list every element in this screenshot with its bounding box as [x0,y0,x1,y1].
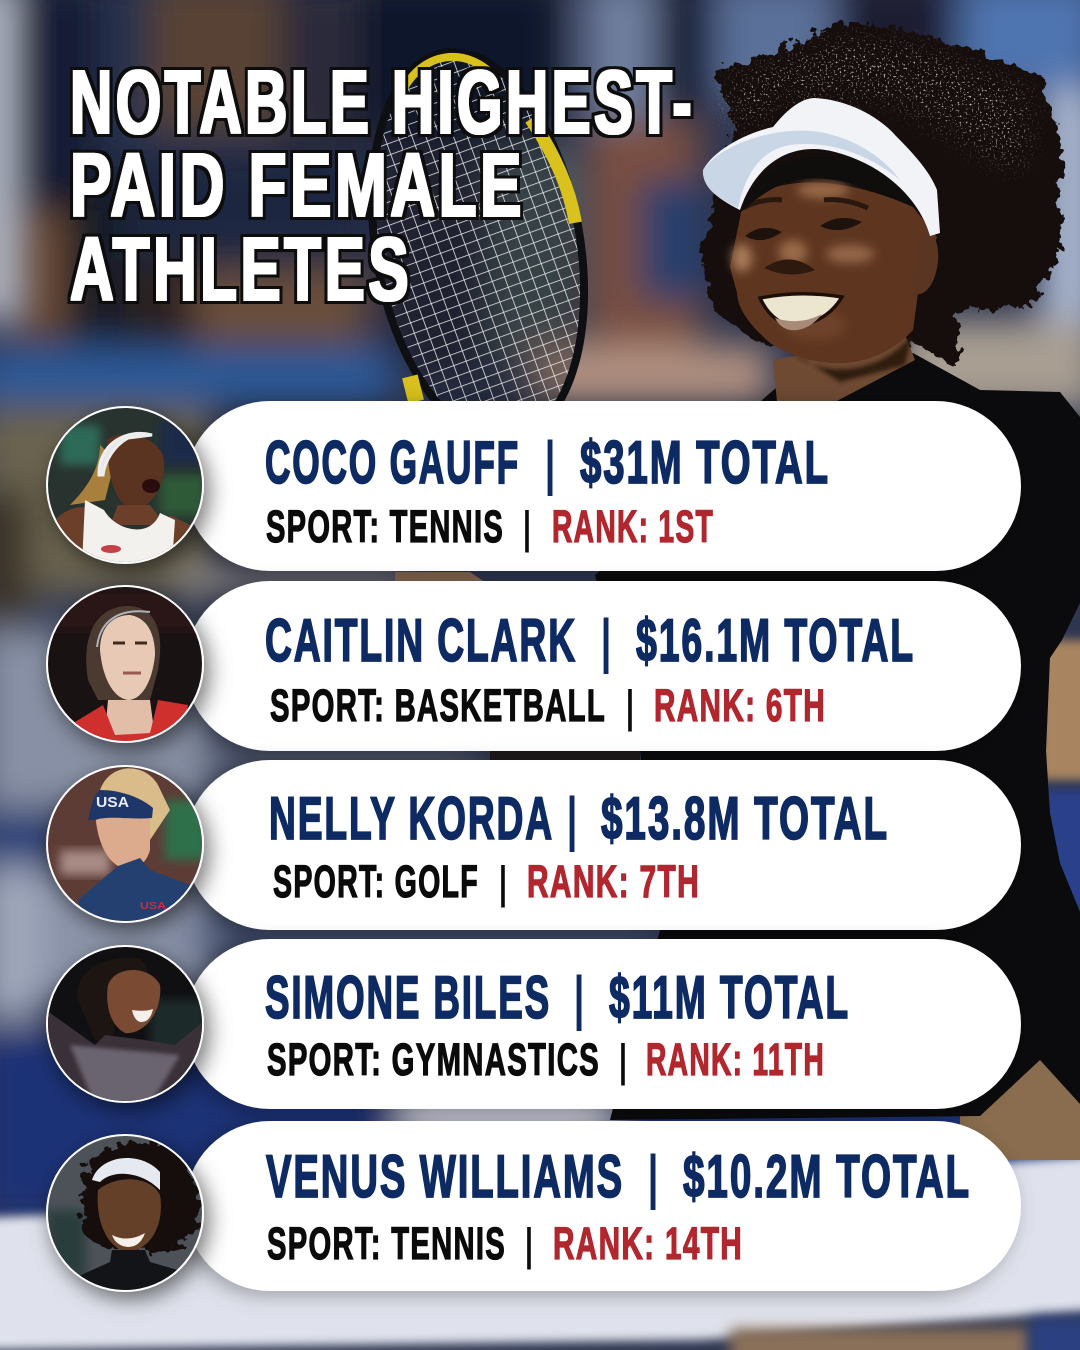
visor [703,98,940,236]
row: Coco Gauff: RANK: 1ST [552,501,714,552]
name and total: VENUS WILLIAMS [266,1143,624,1210]
row: Coco Gauff: $31M TOTAL [580,429,830,496]
row: Venus Williams: | [523,1219,535,1270]
row: Nelly Korda: RANK: 7TH [527,856,700,907]
smile [760,294,842,326]
row: Venus Williams: | [645,1143,661,1210]
row: Nelly Korda: | [564,785,580,852]
row: Venus Williams [46,1121,1021,1295]
sport and rank: SPORT: GYMNASTICS [267,1034,600,1085]
row: Caitlin Clark [46,581,1021,751]
row: Caitlin Clark: $16.1M TOTAL [636,607,915,674]
eyes and brows [745,218,862,240]
row: Coco Gauff: | [542,429,558,496]
portrait: Nelly Korda: USA [96,794,129,811]
row: Caitlin Clark: | [624,681,636,732]
sport and rank: SPORT: TENNIS [267,1218,506,1269]
title: ATHLETES [70,220,412,320]
row: Coco Gauff: | [521,502,533,553]
pill [185,581,1021,751]
row: Coco Gauff [46,401,1021,571]
row: Venus Williams: RANK: 14TH [553,1218,743,1269]
row: Nelly Korda: | [497,857,509,908]
title: PAID FEMALE [70,136,525,236]
neck [773,335,915,402]
arm and thigh [1040,640,1080,780]
row: Simone Biles: $11M TOTAL [609,964,850,1031]
name and total: COCO GAUFF [265,429,520,496]
pill [185,939,1021,1109]
sport and rank: SPORT: BASKETBALL [270,680,606,731]
pill [185,401,1021,571]
visor band [741,156,917,212]
hair [700,22,1063,367]
portrait: Simone Biles [46,945,205,1105]
title [70,53,695,320]
hair highlights [725,40,1030,170]
face highlights [732,182,874,340]
row: Nelly Korda: $13.8M TOTAL [601,785,889,852]
dress [595,353,1080,1120]
name and total: SIMONE BILES [265,964,551,1031]
row: Simone Biles: | [571,964,587,1031]
sport and rank: SPORT: TENNIS [266,501,504,552]
row: Caitlin Clark: | [598,607,614,674]
portrait: Caitlin Clark [46,585,206,745]
name and total: NELLY KORDA [269,785,554,852]
racket [344,35,612,457]
row: Simone Biles: | [617,1035,629,1086]
venus williams hero photo [395,22,1080,1160]
nose [764,259,815,275]
pill [185,1121,1021,1291]
sport and rank: SPORT: GOLF [273,856,479,907]
name and total: CAITLIN CLARK [265,607,577,674]
title: NOTABLE HIGHEST- [70,53,695,153]
portrait: Coco Gauff [46,405,205,565]
portrait: Venus Williams [46,1134,204,1295]
ear [913,232,938,294]
row: Simone Biles [46,939,1021,1109]
row: Nelly Korda [46,760,1021,930]
row: Caitlin Clark: RANK: 6TH [654,680,826,731]
row: Simone Biles: RANK: 11TH [646,1034,825,1085]
portrait: Nelly Korda [46,765,207,925]
face [730,182,937,363]
portrait: Nelly Korda: USA [140,901,166,912]
pill [185,760,1021,930]
